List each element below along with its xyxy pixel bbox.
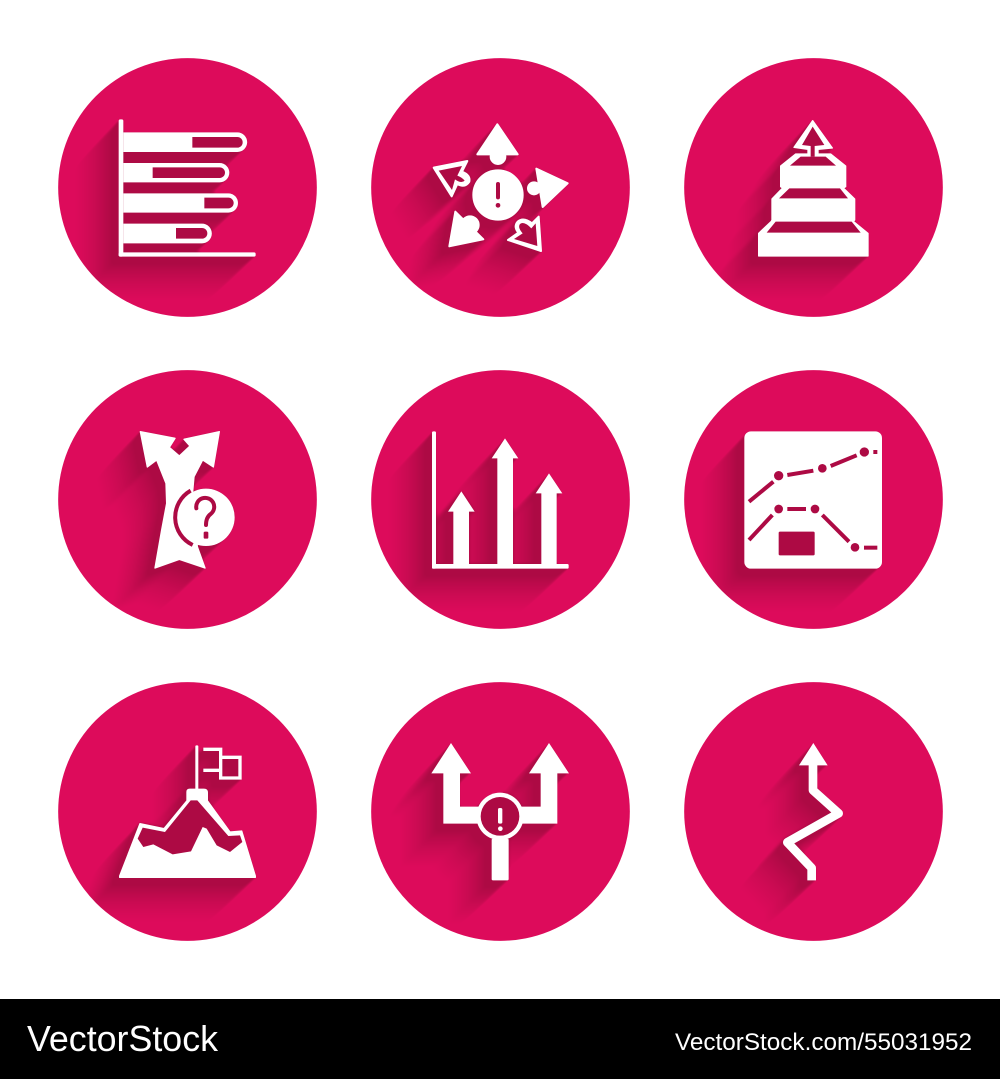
footer bar [0, 999, 1000, 1079]
panel: pyramid with arrow [684, 58, 943, 317]
panel: horizontal bar chart [58, 58, 317, 317]
circle background [58, 682, 317, 941]
icon: mountain peak and flag [120, 745, 255, 877]
circle background [58, 58, 317, 317]
icon: five arrows and alert [434, 124, 568, 251]
icon: stepped pyramid [759, 121, 868, 256]
icon: two way arrows with alert [431, 743, 569, 880]
circle background [371, 370, 630, 629]
circle background [684, 682, 943, 941]
panel: line chart card [684, 370, 943, 629]
panel: arrows around exclamation [371, 58, 630, 317]
panel: fork with question [58, 370, 317, 629]
circle background [684, 370, 943, 629]
icon: dotted line chart [744, 431, 882, 569]
circle background [371, 682, 630, 941]
footer image id text: VectorStock.com/55031952 [675, 1029, 972, 1056]
panel: winding path arrow [684, 682, 943, 941]
icon: zigzag arrow [787, 743, 839, 880]
panel: split road with alert [371, 682, 630, 941]
panel: mountain with flag [58, 682, 317, 941]
panel: arrow bar chart [371, 370, 630, 629]
circle background [371, 58, 630, 317]
icon: bar chart [119, 119, 256, 257]
icon: fork arrows with question mark [140, 432, 235, 568]
footer logo text: VectorStock [27, 1018, 219, 1059]
circle background [58, 370, 317, 629]
circle background [684, 58, 943, 317]
icon: rising arrows chart [432, 431, 569, 569]
